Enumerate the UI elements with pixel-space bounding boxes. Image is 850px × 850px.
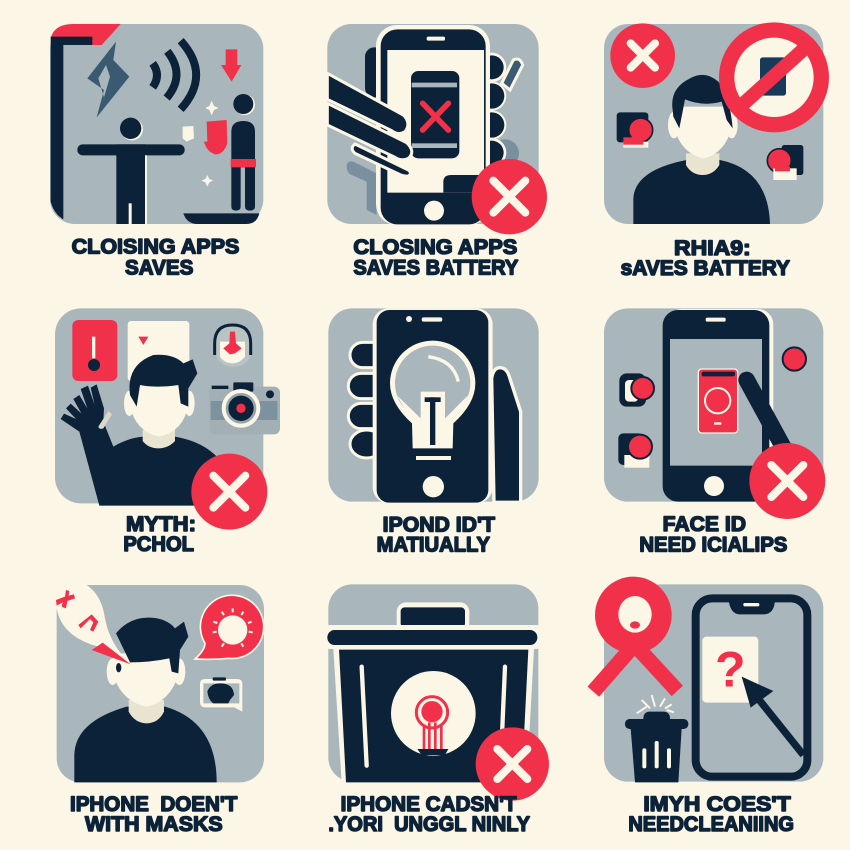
- label: [353, 236, 518, 279]
- phone: [373, 308, 493, 503]
- label: sAVES BATTERY: [621, 257, 790, 280]
- red corner: [51, 24, 121, 45]
- icon: camera bubble: [200, 677, 242, 712]
- label: [377, 514, 495, 557]
- fingers: right: [477, 53, 506, 167]
- label: SAVES BATTERY: [353, 256, 518, 279]
- fingers left: [348, 342, 390, 458]
- panel background: [328, 584, 538, 782]
- panel: face id phone: [604, 308, 825, 557]
- icon: left camera top: [619, 373, 654, 407]
- panel background: [327, 24, 539, 224]
- question card: [702, 637, 758, 703]
- label: WITH MASKS: [85, 813, 223, 836]
- finger: [747, 380, 787, 453]
- panel background: [328, 308, 539, 502]
- inner phone with red x: [411, 71, 459, 158]
- label: SAVES: [125, 256, 193, 279]
- panel: person with prohibited phone: [604, 23, 823, 280]
- case body: [333, 649, 534, 783]
- panel: gesture figures: [50, 24, 263, 279]
- panel: phone with light bulb: [328, 308, 539, 557]
- icon: red hand: [204, 120, 227, 154]
- base platform: [183, 213, 259, 224]
- label: NEED ICIALIPS: [639, 534, 787, 557]
- label: IPHONE DOEN'T: [70, 793, 237, 816]
- icon: red ribbon: [593, 577, 677, 692]
- label: IPHONE CADSN'T: [341, 793, 517, 816]
- label: CLOSING APPS: [353, 236, 517, 259]
- icon: down arrow: [221, 49, 241, 82]
- cream card: [128, 321, 189, 381]
- figure: left person: [77, 118, 185, 224]
- label: RHIA9:: [674, 237, 751, 260]
- label: [328, 793, 530, 836]
- label: FACE ID: [663, 513, 746, 536]
- finger right: [492, 368, 521, 502]
- person waving: [61, 355, 237, 506]
- icon: red x circle: [610, 23, 675, 88]
- person: [633, 75, 770, 224]
- icon: diamond bolt: [87, 42, 129, 117]
- panel background: [604, 584, 823, 782]
- arrow: [742, 677, 803, 755]
- red x badge: [472, 159, 547, 234]
- panel: person waving with camera: [55, 308, 280, 556]
- red x badge: [476, 727, 549, 801]
- icon: camera: [209, 382, 280, 434]
- icon: right red dot: [783, 347, 806, 371]
- panel background: [604, 24, 823, 224]
- label: [639, 513, 787, 557]
- icon: right camera: [767, 145, 803, 180]
- label: NEEDCLEANIING: [628, 813, 794, 836]
- label: IMYH COES'T: [643, 793, 791, 816]
- label: [628, 793, 794, 836]
- label: [70, 793, 237, 836]
- back shapes: [347, 47, 519, 215]
- navy frame: [51, 37, 92, 219]
- finger: blue: [502, 59, 523, 90]
- icon: prohibited phone: [727, 30, 821, 125]
- panel: ribbon, trash and phone: [593, 577, 823, 836]
- phone: [663, 309, 773, 502]
- panel: person with speech bubbles: [55, 585, 264, 836]
- lid: [325, 625, 542, 649]
- question card: ?: [715, 642, 746, 698]
- red x badge: [191, 454, 267, 530]
- label: [72, 235, 239, 279]
- red speech bubble: [195, 595, 264, 659]
- icon: left camera: [617, 112, 653, 148]
- label: MYTH:: [126, 513, 196, 536]
- red beak and marks: [56, 590, 131, 664]
- phone: [376, 25, 490, 225]
- label: CLOISING APPS: [72, 235, 239, 258]
- hand: [327, 73, 412, 176]
- panel background: [55, 308, 263, 503]
- icon: arch: [215, 323, 252, 367]
- person: [74, 618, 217, 782]
- icon: light bulb: [390, 341, 475, 460]
- icon: left camera bottom: [618, 433, 652, 468]
- label: MATIUALLY: [377, 534, 490, 557]
- sparkles: [183, 101, 219, 187]
- icon: trash can: [625, 695, 688, 782]
- panel: phone with hand: [327, 24, 547, 279]
- handle: [397, 602, 469, 632]
- panel background: [57, 585, 264, 782]
- panel: case with bulb: [325, 584, 549, 836]
- panel background: [604, 308, 823, 502]
- red mini phone: [698, 369, 738, 433]
- label: [621, 237, 790, 280]
- speech burst left: [55, 585, 130, 663]
- label: IPOND ID'T: [383, 514, 495, 537]
- label: [123, 513, 196, 556]
- icon: sound waves: [153, 41, 196, 109]
- red x badge: [749, 443, 825, 519]
- icon: red thermometer card: [72, 320, 117, 381]
- panel background: [50, 24, 263, 224]
- phone outline: [696, 598, 807, 777]
- icon: red light bulb: [391, 671, 476, 766]
- label: .YORI UNGGL NINLY: [328, 813, 530, 836]
- label: PCHOL: [123, 533, 194, 556]
- figure: right person: [231, 94, 256, 211]
